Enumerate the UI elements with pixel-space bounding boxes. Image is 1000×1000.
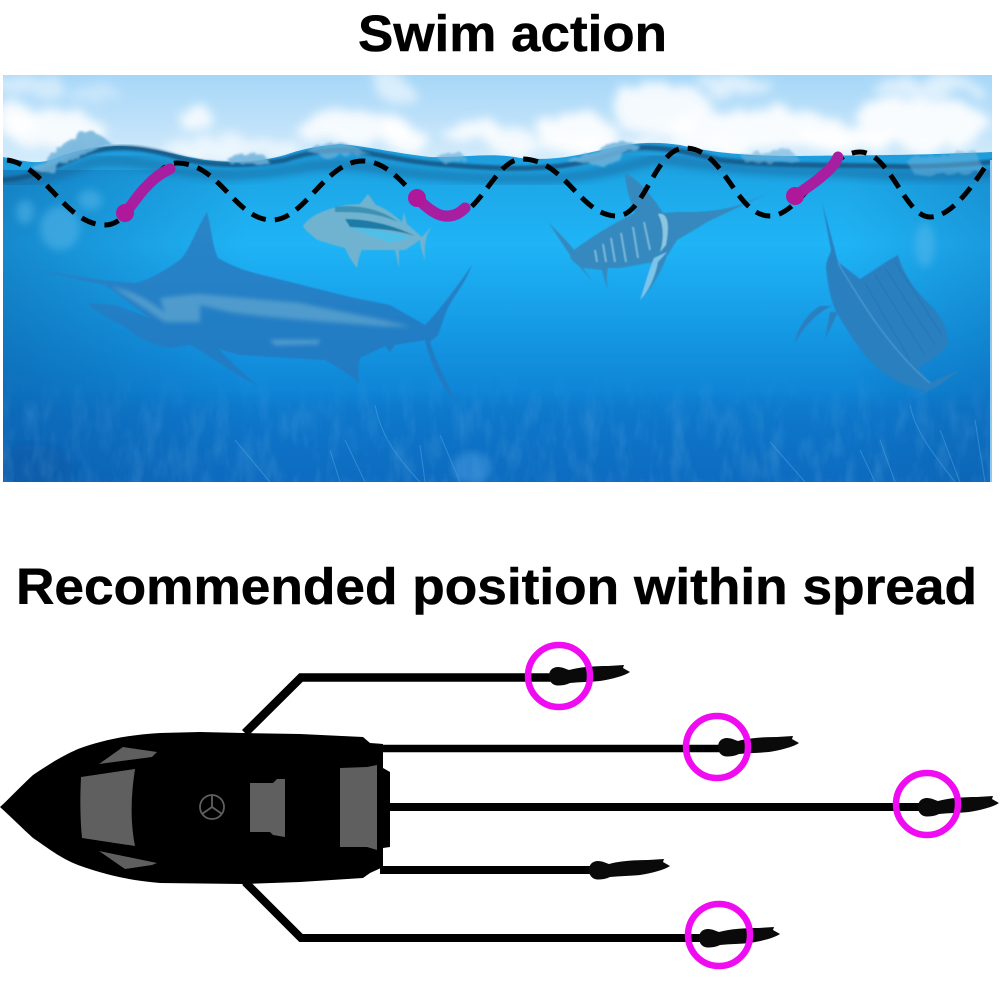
highlight circle 1 [528, 645, 590, 707]
lure 3 [918, 796, 999, 816]
water depth shading [3, 170, 992, 482]
lure 4 [589, 859, 670, 880]
trolling lines [245, 678, 927, 938]
lure 2 [718, 736, 799, 756]
wave foam [32, 130, 985, 176]
bubbles [16, 190, 935, 267]
lure 5 [699, 927, 780, 948]
sea floor with grass [3, 400, 990, 482]
lure: swim position 1 [125, 169, 170, 213]
scene right edge highlight [990, 160, 992, 482]
fish: sailfish [795, 202, 960, 397]
lure 1 [549, 665, 630, 686]
fish: tuna [303, 194, 432, 268]
highlight circle 2 [686, 716, 748, 778]
sea water body [3, 143, 992, 482]
fish: blue marlin [25, 212, 472, 405]
lure head 3 [786, 187, 804, 205]
fish: striped marlin [548, 173, 775, 300]
lure: swim position 2 [417, 198, 465, 216]
lure head 1 [116, 204, 134, 222]
surface dark band [3, 148, 992, 182]
diagram: boat spread [0, 645, 999, 966]
title: Swim action: Swim action [358, 5, 667, 62]
lure head 2 [408, 189, 426, 207]
swim path: dashed wave [7, 148, 985, 225]
highlight circle 3 [896, 773, 958, 835]
boat windows and deck [80, 747, 377, 869]
boat logo [200, 795, 224, 819]
panel: underwater swim action scene [0, 73, 992, 495]
sky with clouds [3, 75, 992, 162]
title: Recommended position within spread: Recommended position within spread [16, 558, 977, 615]
highlight circle 5 [688, 904, 750, 966]
boat hull [0, 732, 390, 884]
lure: swim position 3 [796, 157, 838, 196]
